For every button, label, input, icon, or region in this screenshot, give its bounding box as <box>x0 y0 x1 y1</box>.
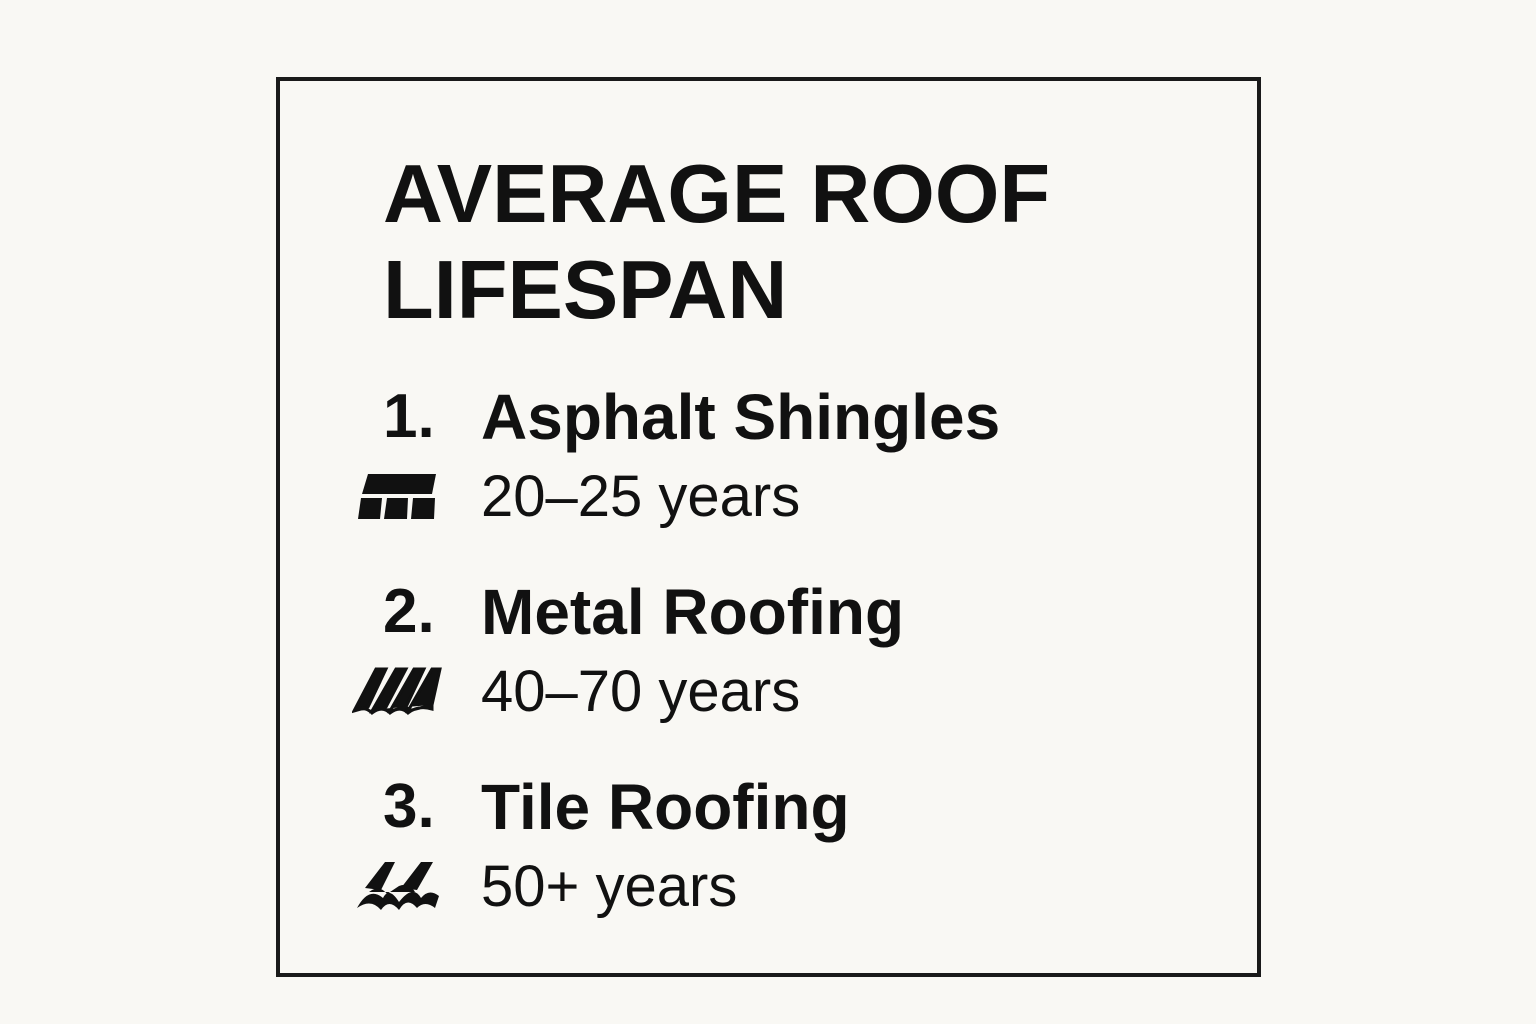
icon: metal roofing <box>352 668 442 715</box>
title: AVERAGE ROOF <box>383 147 1050 240</box>
item 2 number: 2. <box>383 577 435 646</box>
item 1 years: 20–25 years <box>481 464 800 529</box>
item 2 name: Metal Roofing <box>481 576 904 648</box>
title: LIFESPAN <box>383 243 787 336</box>
item 1 number: 1. <box>383 382 435 451</box>
title <box>383 147 1050 336</box>
item 3 name: Tile Roofing <box>481 771 850 843</box>
item 3 number: 3. <box>383 772 435 841</box>
item 2 years: 40–70 years <box>481 659 800 724</box>
icon: tile roofing <box>357 862 439 910</box>
item 1 name: Asphalt Shingles <box>481 381 1000 453</box>
icon: asphalt shingles <box>358 474 436 519</box>
item 3 years: 50+ years <box>481 854 737 919</box>
panel: frame <box>276 77 1261 977</box>
